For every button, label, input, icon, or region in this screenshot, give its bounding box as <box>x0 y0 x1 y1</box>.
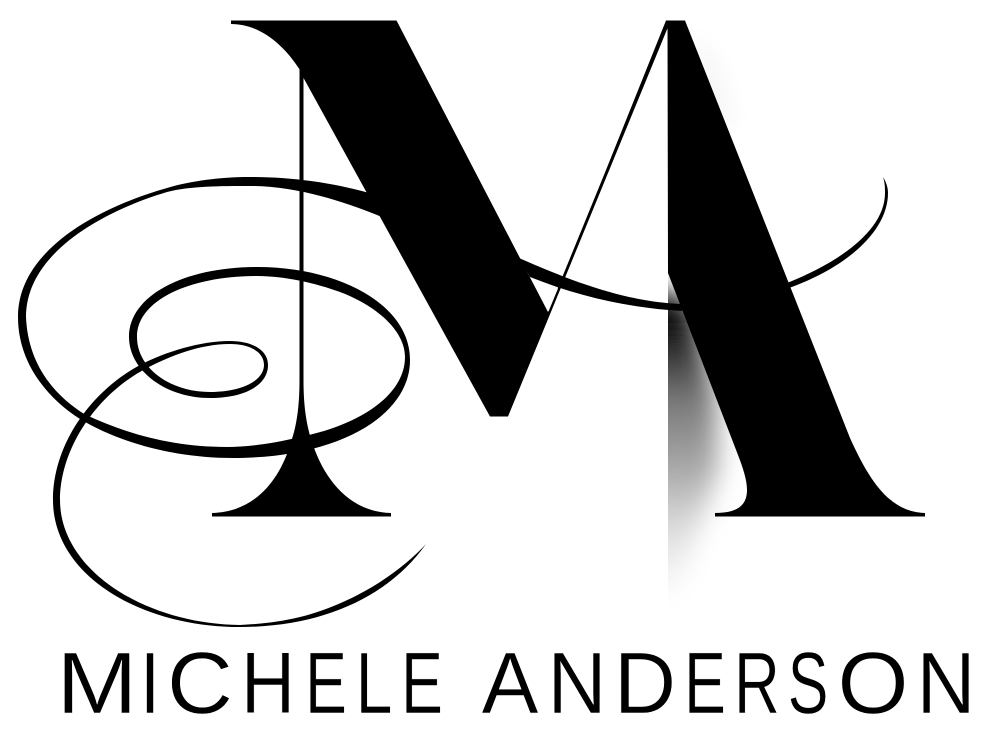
thick left diagonal and thin upstroke of the M <box>231 20 668 416</box>
name: MICHELE ANDERSON: N <box>547 635 607 732</box>
name: MICHELE ANDERSON: M <box>56 635 137 732</box>
name: MICHELE ANDERSON: L <box>356 635 392 732</box>
white gap inside the M crossing <box>530 278 558 312</box>
name: MICHELE ANDERSON: E <box>305 635 347 732</box>
thin left stem with flared serif foot <box>212 66 391 516</box>
name: MICHELE ANDERSON: D <box>613 635 676 732</box>
faint shadow along the top of the right leg <box>690 30 735 130</box>
thick right leg of the M <box>668 20 925 516</box>
name: MICHELE ANDERSON: H <box>241 635 295 732</box>
drop shadow beneath the right leg <box>668 274 734 580</box>
name: MICHELE ANDERSON: A <box>481 635 538 732</box>
name: MICHELE ANDERSON: E <box>684 635 726 732</box>
swash: middle stroke crossing the M <box>519 258 682 311</box>
name: MICHELE ANDERSON: N <box>916 635 975 732</box>
swash: spiral flourish on the left <box>18 177 426 627</box>
name: MICHELE ANDERSON <box>56 635 975 732</box>
name: MICHELE ANDERSON: S <box>788 635 828 732</box>
name: MICHELE ANDERSON: O <box>837 635 909 732</box>
name: MICHELE ANDERSON: C <box>167 635 232 732</box>
name: MICHELE ANDERSON: R <box>734 635 780 732</box>
swash: right tail ending in a tip <box>787 177 888 288</box>
name: MICHELE ANDERSON: E <box>401 635 442 732</box>
logo: Michele Anderson monogram <box>18 20 925 627</box>
name: MICHELE ANDERSON: I <box>140 635 160 732</box>
